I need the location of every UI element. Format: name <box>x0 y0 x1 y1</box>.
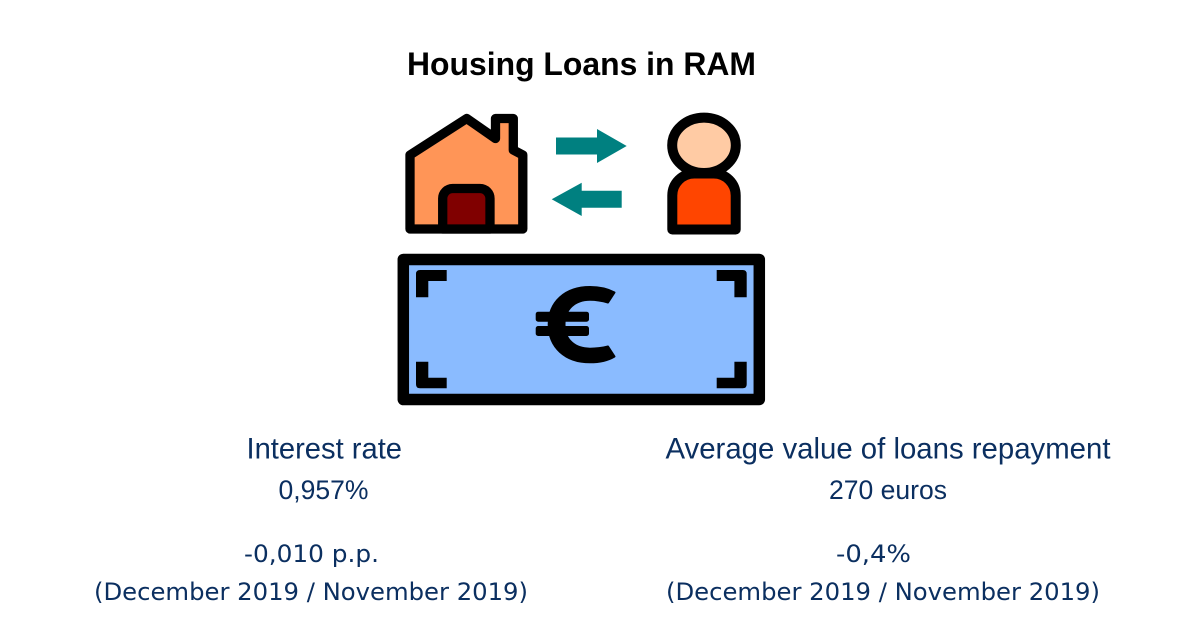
icon: person <box>672 118 736 230</box>
arrow: left <box>552 183 622 216</box>
text block: interest rate: -0,010 p.p. <box>244 540 379 568</box>
text block: average value of loans repayment <box>666 432 1110 606</box>
title: Housing Loans in RAM <box>407 46 756 82</box>
text block: interest rate: Interest rate <box>246 432 402 466</box>
text block: interest rate: (December 2019 / November 2019) <box>94 578 528 606</box>
text block: interest rate: 0,957% <box>278 475 368 505</box>
text block: average value of loans repayment: -0,4% <box>836 540 911 568</box>
text block: interest rate <box>94 432 528 606</box>
icon: euro banknote <box>403 260 759 400</box>
arrow: right <box>556 129 627 163</box>
text block: average value of loans repayment: Average value of loans repayment <box>666 432 1110 466</box>
icon: house <box>410 118 523 234</box>
text block: average value of loans repayment: (December 2019 / November 2019) <box>666 578 1100 606</box>
text block: average value of loans repayment: 270 euros <box>829 475 947 505</box>
